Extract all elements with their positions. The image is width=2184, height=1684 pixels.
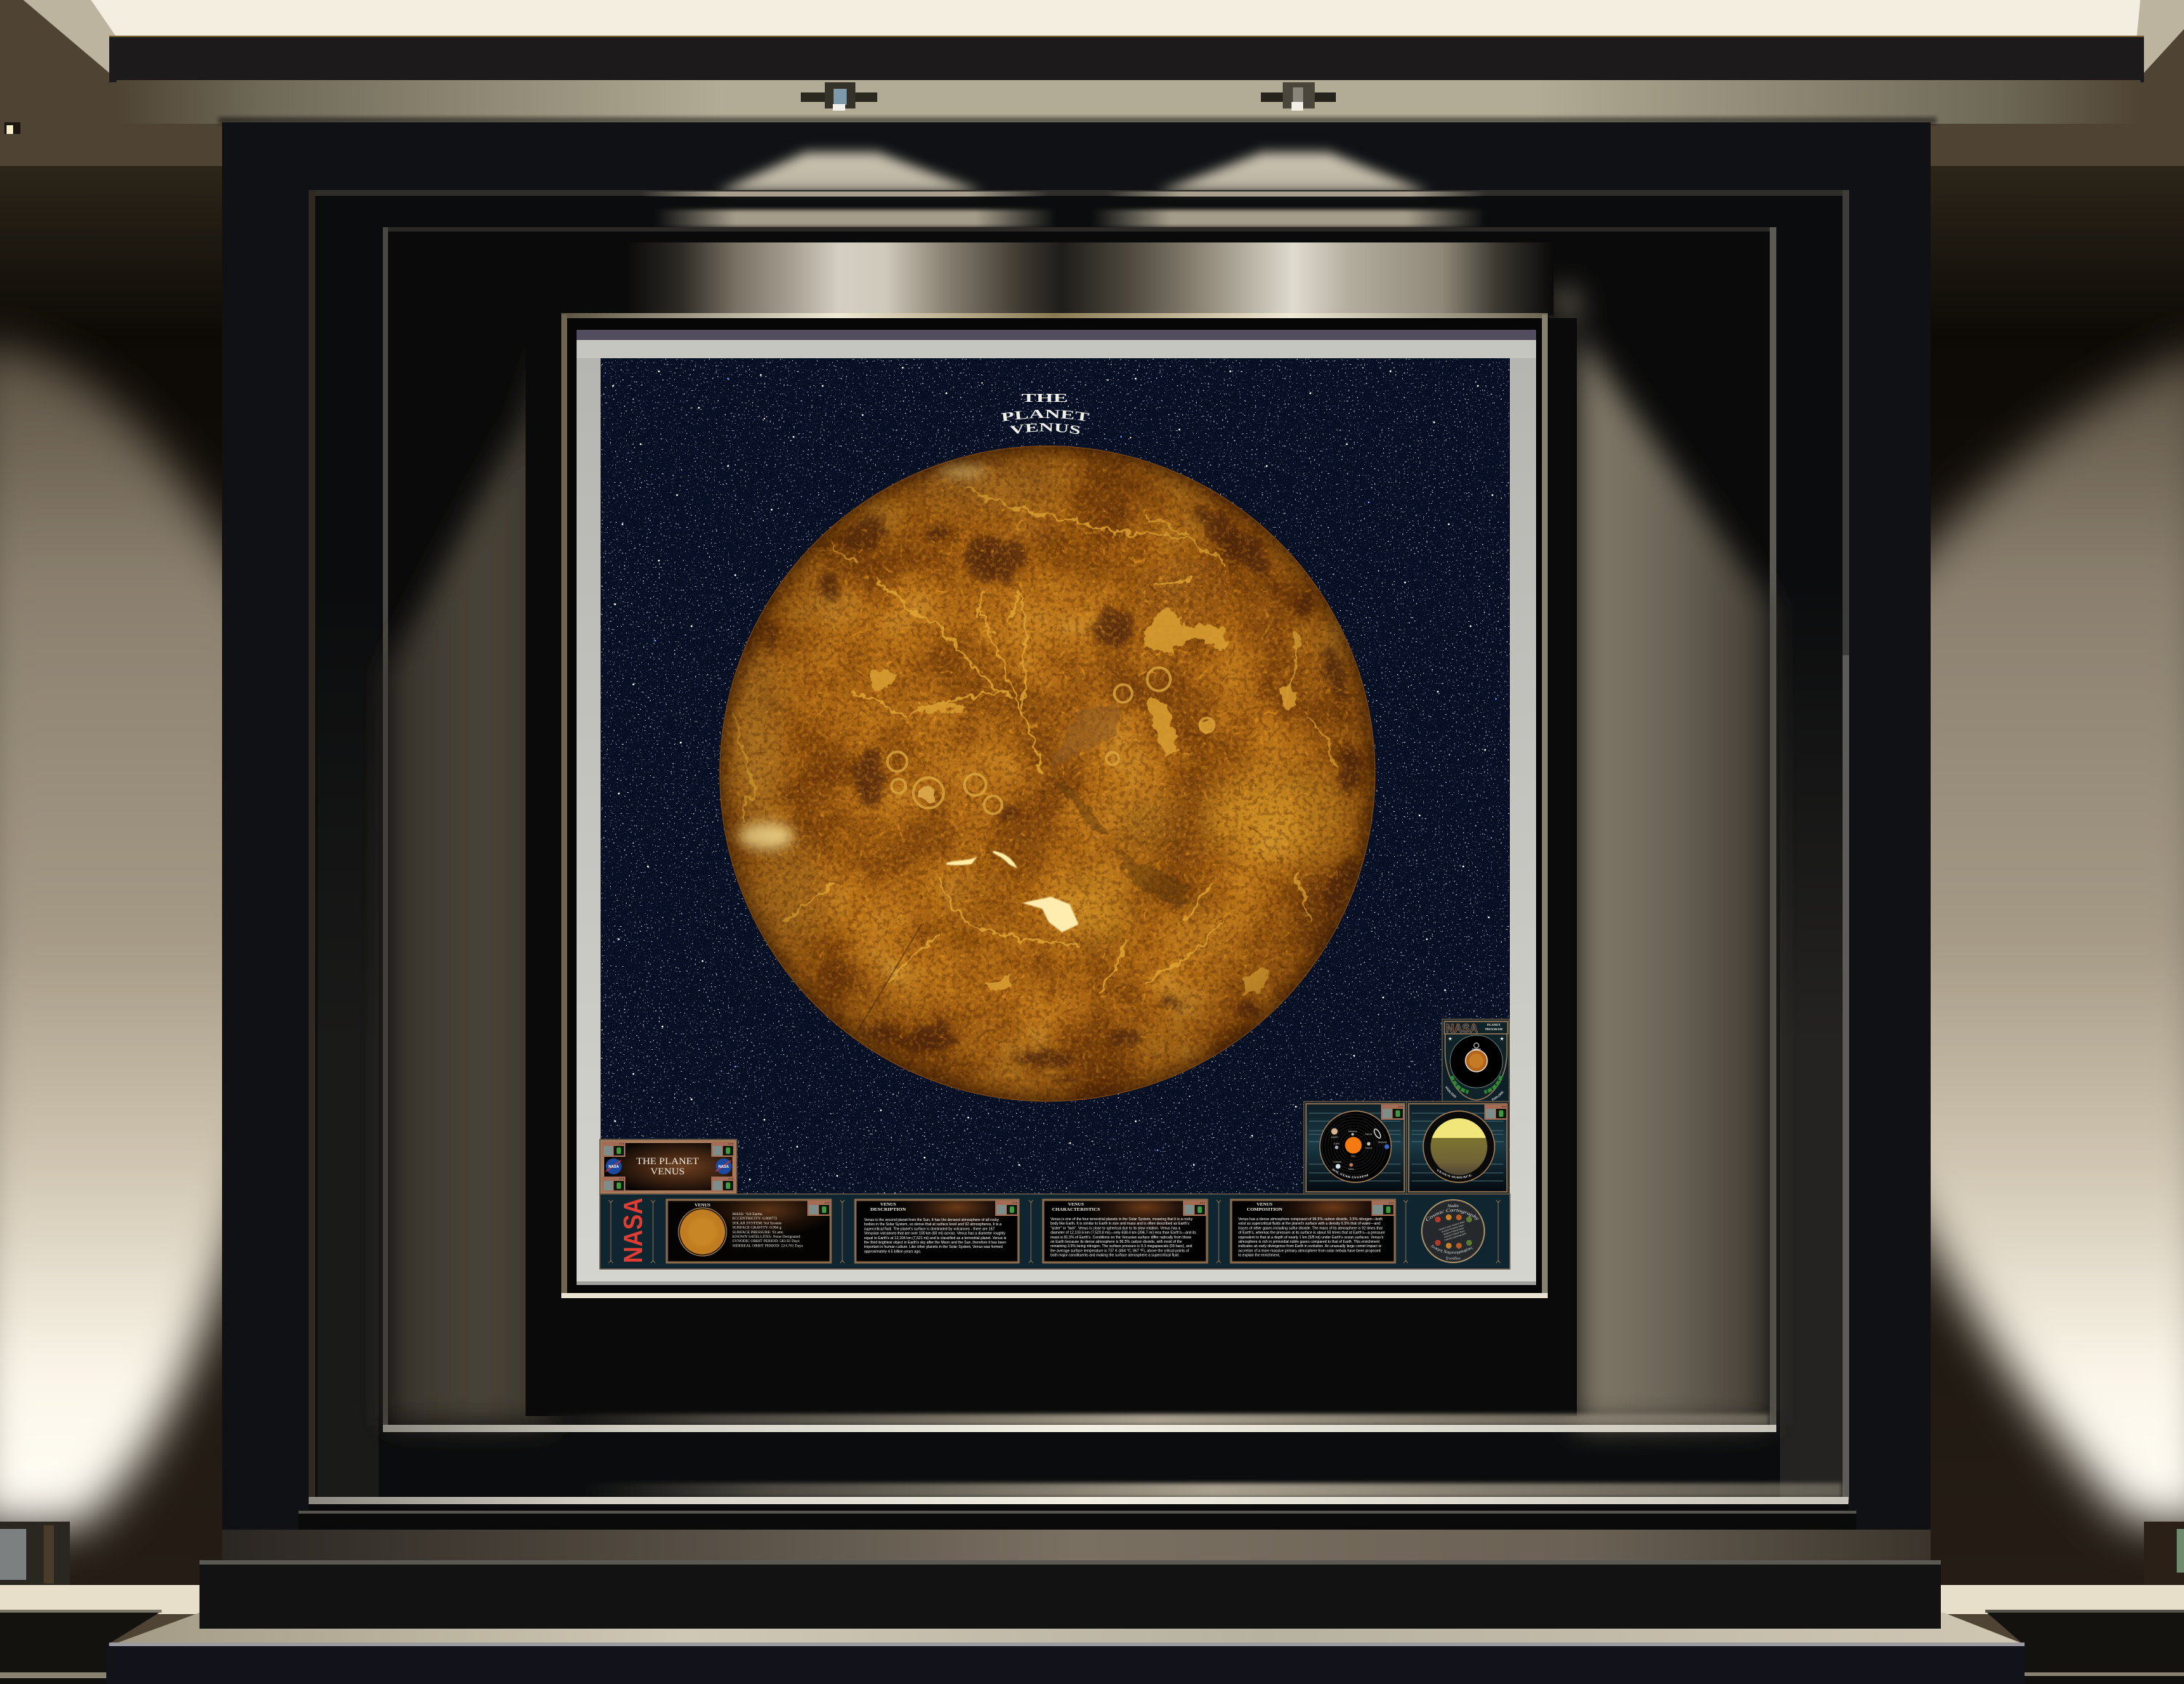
NASA insignia right: NASA — [719, 1165, 729, 1169]
dark display panel — [222, 122, 1931, 1562]
title: VENUS — [1009, 423, 1080, 434]
composition card: equivalent to that at a depth of nearly 1 km (5/8 mi) under Earth's ocean surfaces. Venus's — [1238, 1236, 1384, 1240]
ceiling light cove — [23, 0, 2184, 73]
solar system panel: Venus — [1365, 1147, 1372, 1150]
Venus data card: SOLAR SYSTEM: Sol System — [732, 1221, 782, 1225]
NASA planet program patch: ANALYSIS — [1445, 1086, 1456, 1098]
poster frame — [561, 313, 1548, 1298]
characteristics card: both major constituents and making the surface atmosphere a supercritical fluid. — [1051, 1254, 1179, 1258]
solar system panel: Jupiter — [1331, 1136, 1339, 1139]
characteristics card: on Earth because its dense atmosphere is 96.5% carbon dioxide, with most of the — [1051, 1240, 1182, 1244]
NASA planet program patch: PLANET — [1487, 1023, 1500, 1027]
planet Venus globe — [716, 443, 1381, 1107]
track light right — [1261, 82, 1336, 111]
cosmic cartography studio badge: Modern Political Maps — [1443, 1226, 1465, 1236]
NASA insignia left — [606, 1158, 622, 1174]
title plaque: VENUS — [651, 1166, 685, 1177]
description card — [855, 1200, 1018, 1262]
composition card: accretion of a more massive primary atmosphere from solar nebula have been proposed — [1238, 1249, 1381, 1253]
solar system panel — [1304, 1102, 1406, 1194]
description card: important in human culture. Like other planets in the Solar System, Venus was formed — [864, 1245, 1002, 1249]
dark ceiling beam — [109, 37, 2144, 82]
composition card: of Earth's, whereas the pressure at its surface is about 93 times that at Earth's—a pressure — [1238, 1231, 1385, 1236]
characteristics card: remaining 3.5% being nitrogen. The surface pressure is 9.3 megapascals (93 bars), and — [1051, 1244, 1192, 1249]
description card: equal to Earth's at 12,104 km (7,521 mi) and is classified as a terrestrial planet. Venus is — [864, 1236, 1007, 1241]
Venus data card: MASS: ‘0.8 Earths — [732, 1211, 762, 1217]
plinth — [199, 1560, 1941, 1629]
characteristics card: body like Earth. It is similar to Earth in size and mass and is often described as Earth's — [1051, 1222, 1190, 1226]
poster artwork — [599, 358, 1511, 1270]
light wash beside poster left — [388, 320, 553, 1426]
solar system panel: Mars — [1348, 1168, 1354, 1171]
left wall with spotlight — [0, 122, 277, 1586]
characteristics card: Venus is one of the four terrestrial planets in the Solar System, meaning that it is a rocky — [1051, 1217, 1193, 1222]
NASA planet program patch — [1442, 1019, 1509, 1102]
description card: supercritical fluid. The planet's surface is dominated by volcanoes - there are 167 — [864, 1227, 995, 1231]
NASA planet program patch: PROGRAM — [1485, 1027, 1503, 1031]
cosmic cartography studio badge: Ancient Political Maps — [1444, 1229, 1465, 1238]
floor base — [106, 1643, 2025, 1684]
cosmic cartography studio badge: Celestial Spherographs — [1444, 1232, 1467, 1241]
inner frame moulding — [383, 227, 1776, 1428]
title — [1000, 391, 1089, 434]
solar system panel: Sun — [1351, 1155, 1356, 1158]
solar system panel: Neptune — [1378, 1141, 1388, 1144]
composition card — [1231, 1200, 1395, 1262]
composition card: traces of other gases including sulfur dioxide. The mass of its atmosphere is 92 times that — [1238, 1226, 1383, 1230]
description card: Venus is the second planet from the Sun. It has the densest atmosphere of all rocky — [864, 1218, 1000, 1222]
characteristics card: CHARACTERISTICS — [1052, 1207, 1100, 1212]
title: THE — [1021, 391, 1068, 405]
description card: the third brightest object in Earth's sky after the Moon and the Sun, therefore it has been — [864, 1241, 1006, 1245]
Venus data card: SURFACE GRAVITY: 0.904 g — [732, 1226, 782, 1230]
Venus data card: SURFACE PRESSURE: 93 atm — [732, 1230, 783, 1235]
description card: approximately 4.5 billion years ago. — [864, 1249, 921, 1254]
characteristics card: VENUS — [1068, 1202, 1084, 1207]
right wall with spotlight — [1871, 166, 2184, 1586]
cosmic cartography studio badge: Studio — [1447, 1204, 1459, 1209]
description card: Venusian volcanoes that are over 100 km (60 mi) across. Venus has a diameter roughly — [864, 1232, 1005, 1236]
description card: DESCRIPTION — [871, 1207, 906, 1212]
NASA planet program patch: ★ — [1448, 1036, 1452, 1042]
shadow behind poster — [526, 318, 1769, 1426]
outer frame moulding — [298, 190, 1856, 1530]
Venus data card: VENUS — [695, 1203, 711, 1208]
cosmic cartography studio badge: Cosmic Cartography — [1426, 1209, 1479, 1221]
NASA planet program patch: EXPLORE — [1492, 1091, 1504, 1101]
starfield — [601, 358, 1510, 1195]
Venus data card: SYNODIC ORBIT PERIOD: 583.92 Days — [732, 1239, 799, 1244]
Venus data card: ECCENTRICITY: 0.006772 — [732, 1217, 778, 1221]
characteristics card: "sister" or "twin". Venus is close to spherical due to its slow rotation. Venus has a — [1051, 1226, 1181, 1230]
composition card: VENUS — [1257, 1202, 1273, 1207]
track light left — [801, 82, 877, 111]
title plaque: THE PLANET — [636, 1156, 699, 1166]
floor ledges — [0, 1585, 2184, 1684]
cosmic cartography studio badge: Στούδιο — [1446, 1256, 1460, 1261]
solar system panel: SOL STAR SYSTEM — [1332, 1168, 1369, 1178]
characteristics card: the average surface temperature is 737 K (464 °C; 867 °F), above the critical points of — [1051, 1249, 1190, 1253]
solar system panel: Earth — [1334, 1142, 1340, 1145]
NASA insignia right — [716, 1158, 732, 1174]
bottom information strip — [600, 1194, 1510, 1269]
characteristics card: mass is 81.5% of Earth's. Conditions on the Venusian surface differ radically from those — [1051, 1236, 1192, 1240]
composition card: atmosphere is rich in primordial noble gases compared to that of Earth. This enrichment — [1238, 1240, 1380, 1244]
composition card: to explain the enrichment. — [1238, 1254, 1280, 1258]
cosmic cartography studio badge: Modern Solar System Maps — [1439, 1220, 1465, 1231]
solar system panel: Uranus — [1334, 1161, 1342, 1163]
Venus data card: SIDEREAL ORBIT PERIOD: 224.701 Days — [732, 1244, 803, 1248]
NASA insignia left: NASA — [609, 1165, 619, 1169]
solar system panel: Saturn — [1365, 1133, 1372, 1136]
lit lower beam — [116, 80, 2140, 124]
poster mat — [577, 330, 1536, 1285]
NASA worm logo: NASA — [618, 1198, 648, 1263]
Venus data card: KNOWN SATELLITES: None Designated — [732, 1235, 800, 1239]
NASA planet program patch: ★ — [1500, 1036, 1504, 1042]
solar system panel: Mercury — [1348, 1130, 1357, 1133]
composition card: exist as supercritical fluids at the planet's surface with a density 6.5% that of water—and — [1238, 1222, 1380, 1226]
composition card: indicates an early divergence from Earth in evolution. An unusually large comet impact or — [1238, 1244, 1382, 1249]
light wash above poster — [626, 242, 1554, 315]
Venus data card — [667, 1200, 831, 1262]
NASA planet program patch: NASA — [1446, 1021, 1478, 1035]
Venus surface panel: VENUS SURFACE — [1437, 1169, 1472, 1178]
cosmic cartography studio badge — [1422, 1200, 1484, 1262]
description card: bodies in the Solar System, so dense that at surface level and 92 atmospheres, it is a — [864, 1222, 1002, 1227]
characteristics card: diameter of 12,103.6 km (7,520.8 mi)—only 638.4 km (396.7 mi) less than Earth's—and its — [1051, 1231, 1196, 1236]
title plaque — [600, 1139, 737, 1194]
Venus surface panel — [1406, 1101, 1510, 1194]
title: PLANET — [1000, 409, 1089, 422]
light cones above poster frames — [716, 152, 1430, 192]
composition card: Venus has a dense atmosphere composed of 96.5% carbon dioxide, 3.5% nitrogen—both — [1238, 1217, 1382, 1222]
cosmic cartography studio badge: Ancient Planetary Maps — [1441, 1223, 1465, 1233]
inner frame bottom light line — [383, 1425, 1776, 1432]
light wash beside poster right — [1548, 291, 1770, 1426]
characteristics card — [1043, 1200, 1207, 1262]
composition card: COMPOSITION — [1246, 1207, 1283, 1212]
cosmic cartography studio badge: Διαμη Χαρτογραφίας — [1431, 1245, 1473, 1254]
description card: VENUS — [880, 1202, 896, 1207]
lower taupe band — [222, 1530, 1931, 1562]
